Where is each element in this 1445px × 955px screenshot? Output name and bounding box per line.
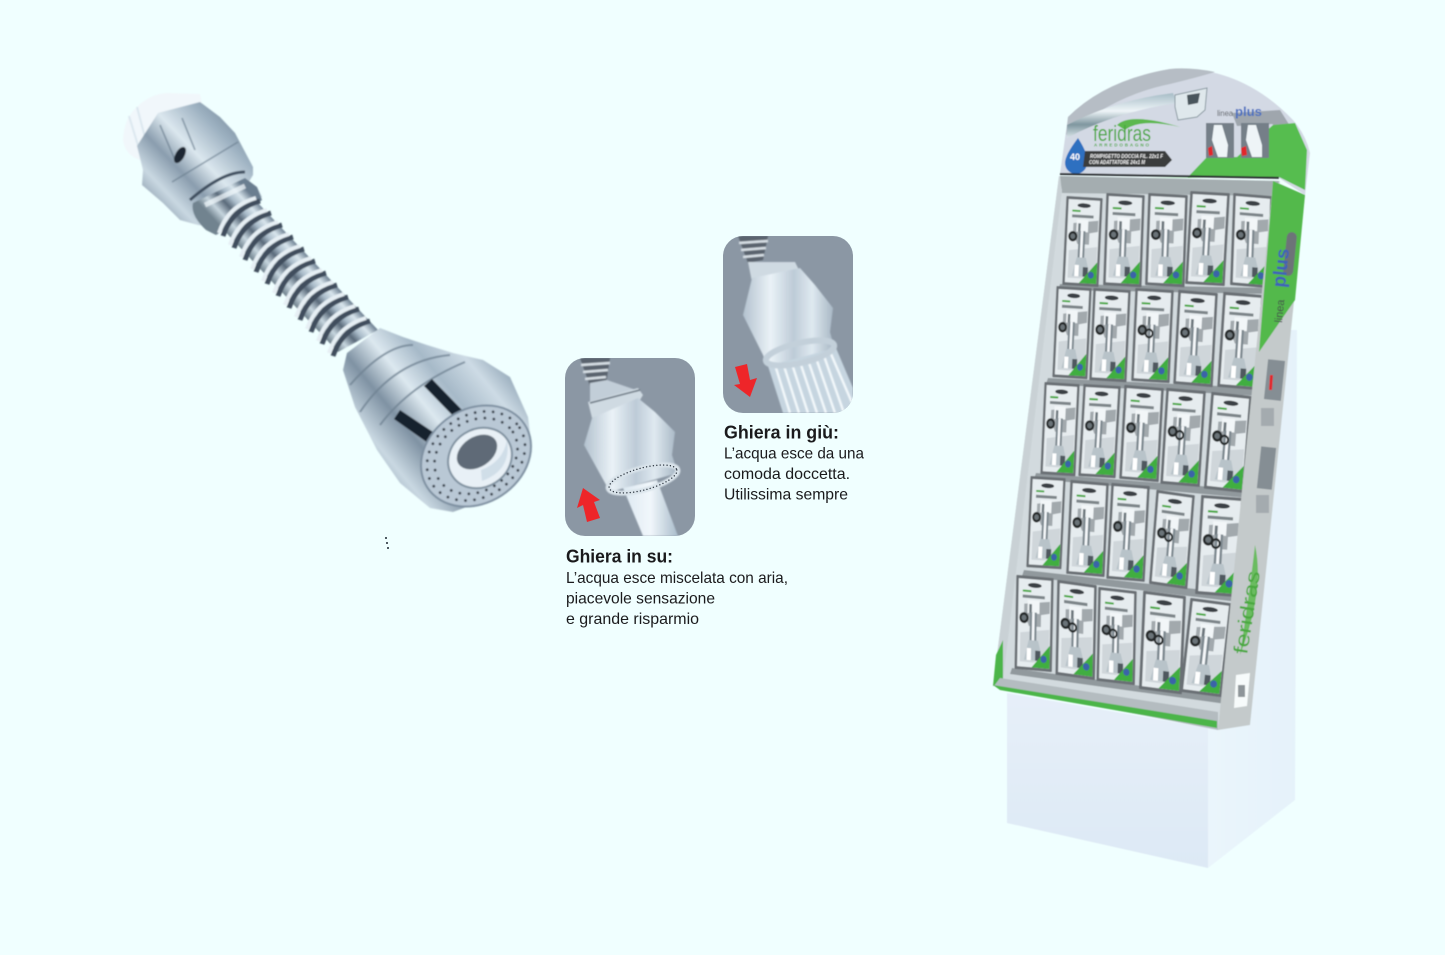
caption: ring down: Ghiera in giù: xyxy=(724,422,839,442)
packets row 1 xyxy=(1062,191,1273,288)
product photo: swivel shower aerator xyxy=(123,93,550,527)
shelf interior xyxy=(993,176,1280,730)
right wing panel: plus xyxy=(1269,247,1294,289)
white base front xyxy=(1007,693,1208,868)
right wing panel: feridras xyxy=(1230,569,1265,656)
caption: ring up: Ghiera in su: xyxy=(566,546,673,566)
linea plus: plus xyxy=(1235,104,1262,119)
stray dots xyxy=(385,537,389,549)
hex nut xyxy=(137,102,262,235)
caption: ring down: L’acqua esce da una xyxy=(724,446,864,462)
wing logo xyxy=(1240,545,1258,655)
caption: ring down: Utilissima sempre xyxy=(724,486,848,504)
brand logo: ARREDOBAGNO xyxy=(1094,142,1149,148)
arrow down xyxy=(734,364,757,397)
packets row 5 xyxy=(1014,575,1232,697)
caption: ring up: piacevole sensazione xyxy=(566,590,715,608)
stream of water xyxy=(623,480,678,536)
header thumbnails xyxy=(1206,123,1269,158)
black product label: ROMPIGETTO DOCCIA FIL. 22x1 F xyxy=(1090,154,1164,160)
caption: ring up: L’acqua esce miscelata con aria, xyxy=(566,570,788,587)
perforated face xyxy=(402,385,550,527)
black product label: CON ADATTATORE 24x1 M xyxy=(1089,160,1146,166)
panel: ring up photo xyxy=(565,358,695,536)
water drop badge: 40 xyxy=(1070,152,1080,162)
spout picture xyxy=(1067,93,1177,138)
header arch xyxy=(1060,69,1310,195)
wing thumbnails xyxy=(1264,359,1285,401)
neck xyxy=(193,178,262,235)
packets row 3 xyxy=(1040,382,1252,493)
ring of holes xyxy=(604,462,682,496)
linea plus xyxy=(1217,104,1262,119)
ring of holes xyxy=(764,335,836,371)
water drop badge xyxy=(1065,138,1087,174)
display stand xyxy=(993,68,1310,868)
caption: ring up xyxy=(566,546,788,628)
shower spray xyxy=(768,348,853,413)
centre hole with mesh xyxy=(437,416,523,500)
panel: ring down photo xyxy=(723,236,853,413)
green front lip xyxy=(993,685,1217,728)
flexible hose xyxy=(219,203,378,352)
caption: ring up: e grande risparmio xyxy=(566,611,699,628)
packets row 4 xyxy=(1026,476,1244,597)
black product label xyxy=(1083,151,1172,167)
arrow up xyxy=(577,488,600,522)
caption: ring down: comoda doccetta. xyxy=(724,466,850,483)
caption: ring down xyxy=(724,422,864,504)
packets row 2 xyxy=(1052,286,1264,390)
white threaded end xyxy=(123,93,202,160)
right wing panel: linea xyxy=(1273,298,1288,323)
linea plus: linea xyxy=(1217,108,1233,118)
white back side panel xyxy=(1208,330,1297,868)
right wing panel xyxy=(1218,181,1305,730)
barcode sticker xyxy=(1234,673,1250,708)
shelf rows shadow xyxy=(1010,284,1272,704)
nozzle head xyxy=(343,328,530,512)
brand logo: feridras xyxy=(1093,121,1151,146)
